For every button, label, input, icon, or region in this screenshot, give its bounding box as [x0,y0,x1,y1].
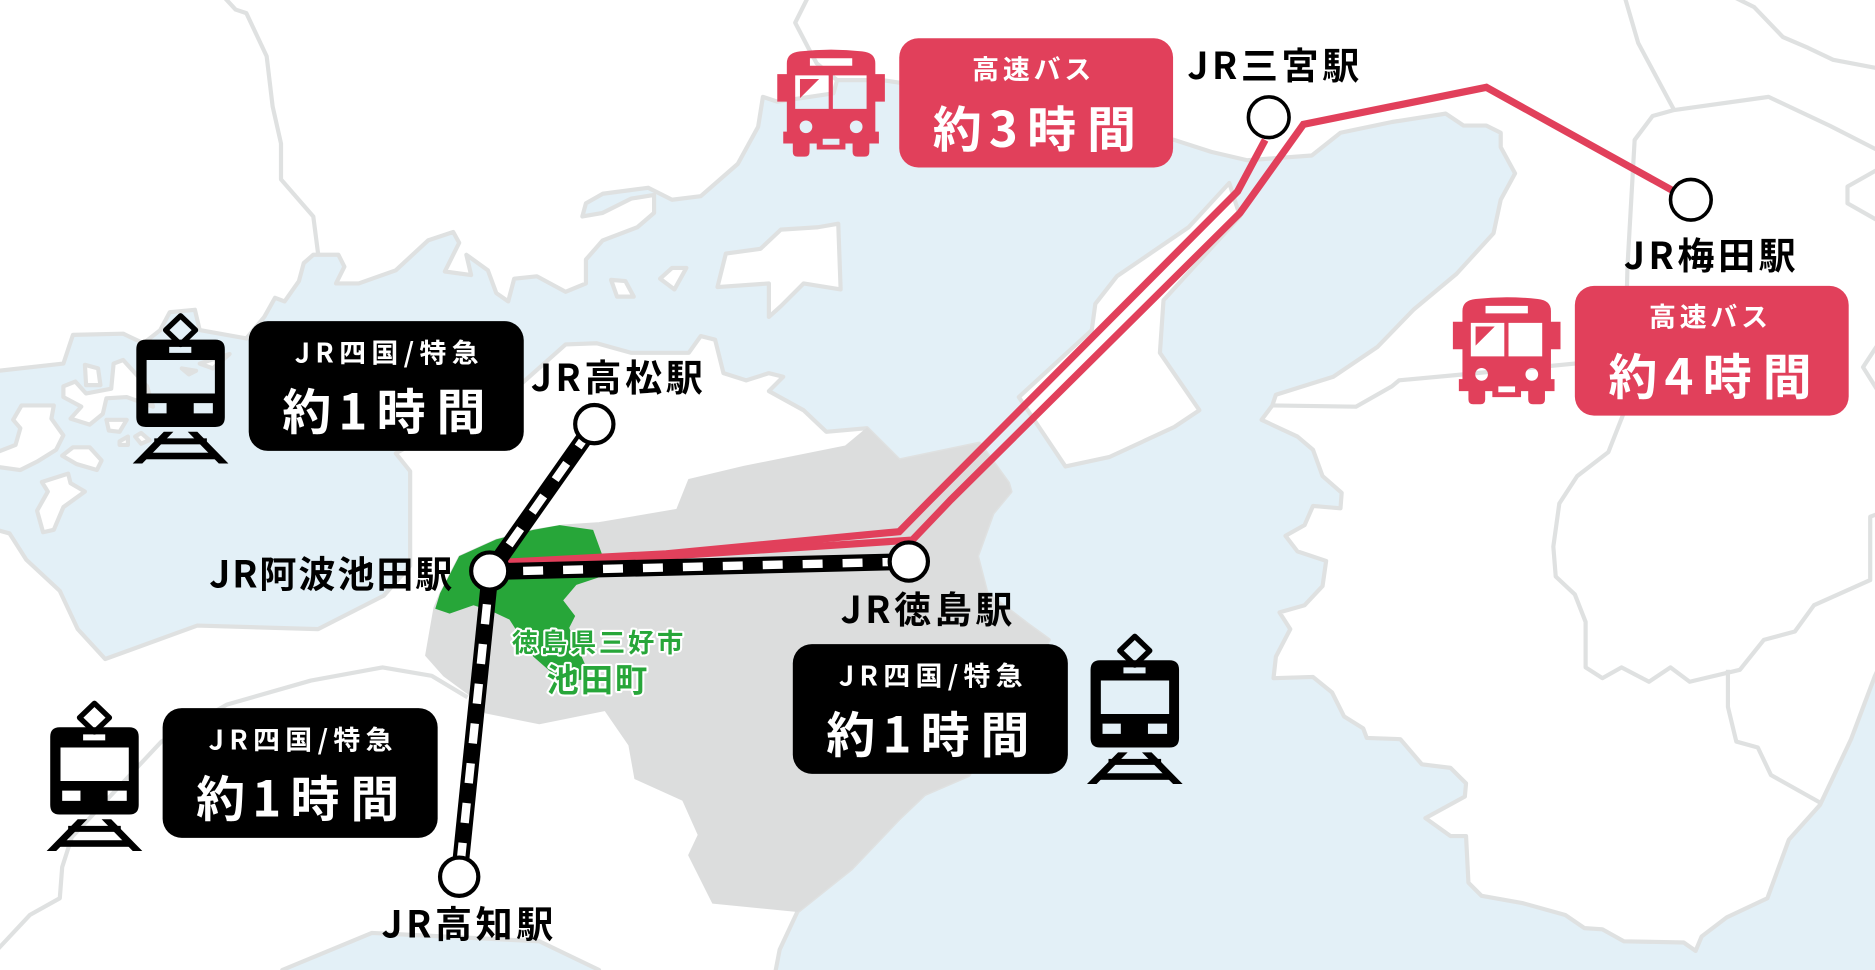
callout: JR Shikoku limited express to Tokushima [793,644,1068,774]
callout: JR Shikoku limited express to Kochi: 約1時間 [196,760,399,831]
label: Ikeda-cho: 池田町 [546,655,649,701]
station marker: Kochi [440,858,478,896]
icon: bus, Sannomiya route [777,50,885,157]
station marker: Umeda [1671,179,1711,220]
label: JR Awa-Ikeda: JR阿波池田駅 [209,544,454,598]
route: JR to Tokushima [490,562,909,572]
icon: train, Takamatsu route [133,316,228,463]
route: expressway bus to Umeda [507,87,1674,562]
route: expressway bus to Sannomiya [507,140,1265,562]
label: JR Tokushima: JR徳島駅 [841,580,1016,634]
islands [0,183,1240,532]
callout: expressway bus to Umeda: 約4時間 [1608,339,1812,410]
callout: JR Shikoku limited express to Takamatsu [249,321,524,451]
callout: JR Shikoku limited express to Takamatsu: JR四国/特急 [295,331,484,370]
callout: expressway bus to Sannomiya: 高速バス [972,48,1095,87]
icon: train, Kochi route [47,703,142,851]
station marker: Takamatsu [575,405,613,443]
callout: expressway bus to Sannomiya [899,38,1173,167]
icon: bus, Umeda route [1453,297,1561,404]
station marker: Awa-Ikeda [471,552,508,590]
callout: JR Shikoku limited express to Kochi [163,708,438,838]
callout: JR Shikoku limited express to Takamatsu: 約1時間 [282,373,485,444]
icon: train, Tokushima route [1087,636,1183,784]
label: JR Sannomiya: JR三宮駅 [1187,36,1363,90]
land: Ikeda-cho highlighted area [435,525,603,682]
label: JR Kochi: JR高知駅 [381,895,557,949]
label: JR Takamatsu: JR高松駅 [531,348,706,402]
land: Shikoku and Kyushu [0,336,1049,970]
label: JR Umeda: JR梅田駅 [1624,226,1799,280]
callout: expressway bus to Umeda: 高速バス [1649,296,1772,335]
callout: expressway bus to Sannomiya: 約3時間 [933,91,1136,162]
route: JR to Takamatsu [490,424,594,572]
route: JR to Kochi [459,572,490,877]
callout: JR Shikoku limited express to Kochi: JR四国/特急 [209,718,398,757]
land: Tokushima prefecture [426,428,1049,911]
label: Miyoshi city, Tokushima: 徳島県三好市 [512,621,686,660]
station marker: Sannomiya [1248,97,1289,138]
callout: expressway bus to Umeda [1575,286,1849,416]
station marker: Tokushima [890,542,928,581]
callout: JR Shikoku limited express to Tokushima: 約1時間 [826,696,1030,767]
callout: JR Shikoku limited express to Tokushima: JR四国/特急 [839,654,1028,693]
